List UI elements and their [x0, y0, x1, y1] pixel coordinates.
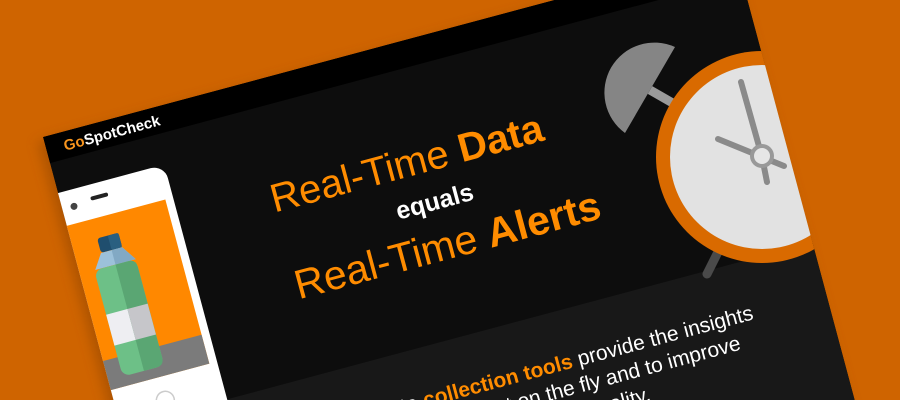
phone camera dot	[70, 202, 78, 210]
title	[270, 122, 600, 298]
title: Real-Time Data	[265, 106, 549, 221]
alarm clock	[604, 42, 814, 278]
phone speaker	[90, 192, 109, 201]
title: equals	[393, 178, 477, 226]
bottle	[95, 233, 162, 375]
bell	[604, 42, 675, 133]
logo: GoSpotCheck	[62, 112, 163, 155]
clock face	[656, 51, 814, 263]
clock leg	[707, 240, 724, 274]
title: Real-Time Alerts	[289, 182, 606, 308]
home button	[156, 390, 175, 400]
phone	[58, 168, 228, 400]
phone screen	[66, 200, 210, 390]
